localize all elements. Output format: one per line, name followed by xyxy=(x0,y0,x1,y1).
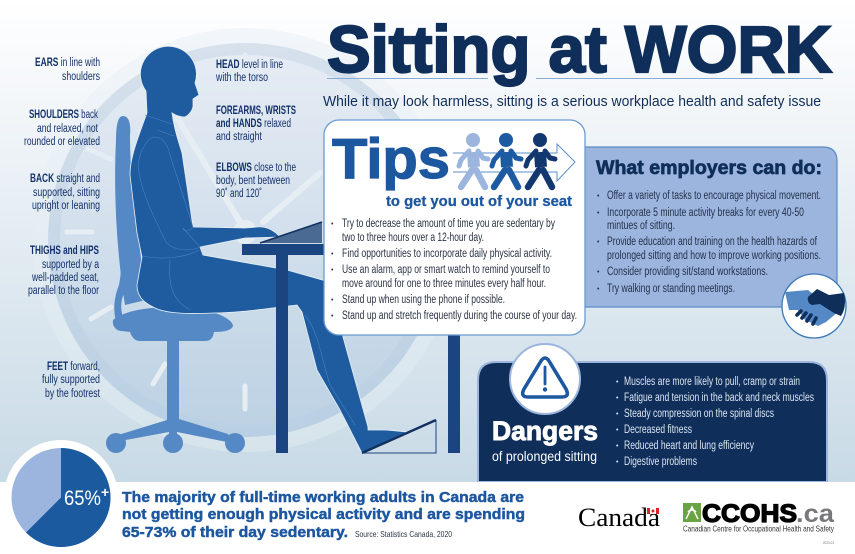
tips heading: Tips xyxy=(332,127,450,191)
icon: walking people xyxy=(459,133,555,187)
left posture labels: parallel to the floor xyxy=(28,285,99,297)
left posture labels: THIGHS and HIPS xyxy=(30,245,99,257)
desk xyxy=(242,244,460,453)
right posture labels: and straight xyxy=(216,131,263,143)
tips list: • xyxy=(331,221,334,228)
dangers list: • xyxy=(616,395,619,402)
right posture labels: body, bent between xyxy=(216,175,290,187)
right posture labels: and HANDS relaxed xyxy=(216,118,291,130)
left posture labels: rounded or elevated xyxy=(24,136,100,148)
left posture labels xyxy=(24,57,101,400)
tips list: Try to decrease the amount of time you are sedentary by xyxy=(342,218,555,230)
statistic statement xyxy=(122,490,525,541)
right posture labels: ELBOWS close to the xyxy=(216,162,296,174)
employers list: • xyxy=(597,269,600,276)
tips list: • xyxy=(331,313,334,320)
left posture labels: BACK straight and xyxy=(30,173,100,185)
left posture labels: SHOULDERS back xyxy=(29,109,98,121)
statistic statement: The majority of full-time working adults in Canada are xyxy=(122,490,524,506)
employers heading: What employers can do: xyxy=(596,157,822,179)
pie chart: 65% xyxy=(4,440,118,554)
icon: warning xyxy=(510,344,580,414)
dangers list: Muscles are more likely to pull, cramp or strain xyxy=(624,376,800,388)
panel: what employers can do xyxy=(570,147,837,307)
clock illustration xyxy=(33,28,457,452)
pie chart: 65%: 65% xyxy=(64,487,101,510)
edition code: 2023-03 xyxy=(823,540,835,545)
keyboard xyxy=(260,222,322,243)
footer xyxy=(0,482,855,554)
left posture labels: by the footrest xyxy=(45,388,101,400)
left posture labels: supported by a xyxy=(42,259,99,271)
tips list: • xyxy=(331,267,334,274)
statistic statement: 65-73% of their day sedentary. xyxy=(122,525,348,541)
pie chart: 65%: + xyxy=(101,484,109,500)
employers list: mintues of sitting. xyxy=(607,220,675,232)
left posture labels: fully supported xyxy=(42,374,100,386)
dangers list: • xyxy=(616,427,619,434)
tips list: Stand up when using the phone if possible. xyxy=(342,294,505,306)
left posture labels: FEET forward, xyxy=(47,361,100,373)
seated figure xyxy=(130,46,407,453)
panel: dangers xyxy=(478,344,827,482)
dangers heading: Dangers xyxy=(492,416,598,446)
statistic statement: not getting enough physical activity and are spending xyxy=(122,507,525,523)
tips list: move around for one to three minutes every half hour. xyxy=(342,278,546,290)
employers list: Try walking or standing meetings. xyxy=(607,283,735,295)
logo: CCOHS: CCOHS xyxy=(702,500,797,528)
dangers list xyxy=(616,376,814,468)
left posture labels: supported, sitting xyxy=(33,187,100,199)
tips list: • xyxy=(331,297,334,304)
logo: CCOHS: .ca xyxy=(796,500,835,528)
tips list: Stand up and stretch frequently during the course of your day. xyxy=(342,310,577,322)
dangers list: Steady compression on the spinal discs xyxy=(624,408,774,420)
right posture labels: 90˚ and 120˚ xyxy=(216,188,262,200)
dangers list: • xyxy=(616,379,619,386)
icon: handshake xyxy=(782,274,846,338)
left posture labels: shoulders xyxy=(62,71,100,83)
employers list: • xyxy=(597,193,600,200)
right posture labels xyxy=(215,59,296,200)
panel: tips xyxy=(324,120,585,335)
tips subheading: to get you out of your seat xyxy=(386,193,572,210)
dangers list: • xyxy=(616,459,619,466)
left posture labels: upright or leaning xyxy=(32,200,100,212)
footrest xyxy=(362,420,436,453)
logo: Canada: Canada xyxy=(578,503,660,532)
tips list xyxy=(331,218,577,322)
tips list: Use an alarm, app or smart watch to remind yourself to xyxy=(342,264,550,276)
dangers list: Digestive problems xyxy=(624,456,697,468)
dangers list: • xyxy=(616,443,619,450)
employers list: • xyxy=(597,239,600,246)
title: Sitting at WORK xyxy=(327,12,832,86)
logo: CCOHS xyxy=(683,500,835,534)
subtitle: While it may look harmless, sitting is a serious workplace health and safety issue xyxy=(323,93,821,110)
dangers list: Decreased fitness xyxy=(624,424,692,436)
left posture labels: well-padded seat, xyxy=(31,272,99,284)
employers list: • xyxy=(597,210,600,217)
left posture labels: EARS in line with xyxy=(35,57,100,69)
right posture labels: with the torso xyxy=(215,72,268,84)
office chair xyxy=(106,116,245,453)
dangers subheading: of prolonged sitting xyxy=(492,449,597,464)
icon: arrow xyxy=(453,144,575,181)
tips list: two to three hours over a 12-hour day. xyxy=(342,232,484,244)
dangers list: • xyxy=(616,411,619,418)
dangers list: Reduced heart and lung efficiency xyxy=(624,440,754,452)
right posture labels: HEAD level in line xyxy=(216,59,283,71)
tips list: • xyxy=(331,251,334,258)
right posture labels: FOREARMS, WRISTS xyxy=(216,105,296,117)
employers list: • xyxy=(597,286,600,293)
source: Source: Statistics Canada, 2020 xyxy=(355,529,452,539)
left posture labels: and relaxed, not xyxy=(37,123,99,135)
employers list xyxy=(597,190,821,295)
tips list: Find opportunities to incorporate daily physical activity. xyxy=(342,248,552,260)
employers list: Consider providing sit/stand workstations. xyxy=(607,266,768,278)
